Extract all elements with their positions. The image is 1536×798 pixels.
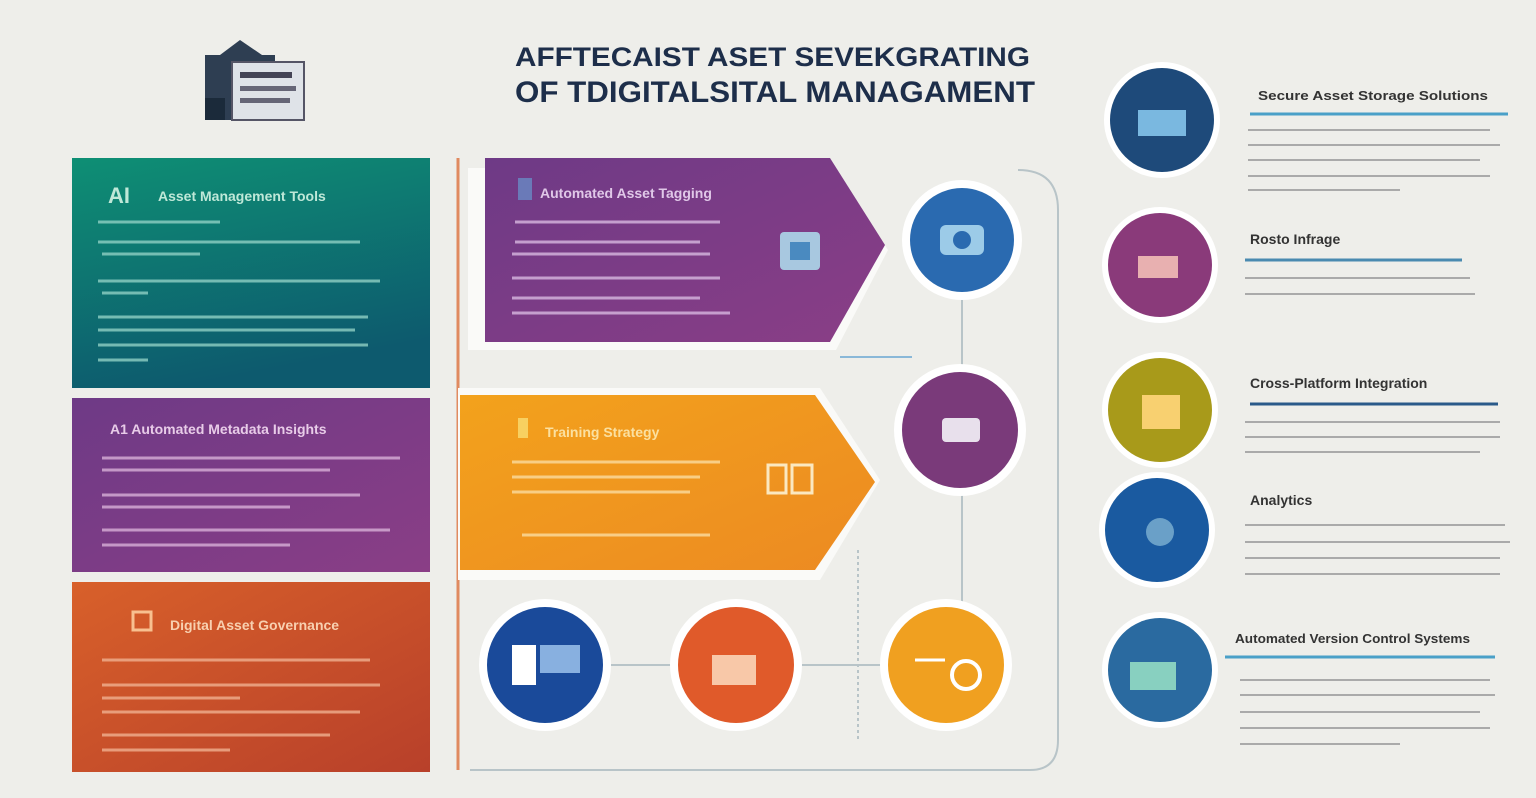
item 1: Secure Asset Storage Solutions [1258, 88, 1488, 103]
item 3: Cross-Platform Integration [1250, 375, 1427, 391]
item 5 [1102, 612, 1495, 744]
panel: red-orange left: Digital Asset Governance [170, 617, 339, 633]
icon: document [780, 232, 820, 270]
icon: circle purple [894, 364, 1026, 496]
panel: orange arrow banner [458, 388, 880, 580]
title [515, 42, 1035, 109]
icon: document header [205, 40, 304, 120]
panel: teal left: Asset Management Tools [158, 188, 326, 204]
icon: grid [768, 465, 812, 493]
item 2: Rosto Infrage [1250, 231, 1340, 247]
item 1 [1104, 62, 1508, 190]
panel: red-orange left [72, 582, 430, 772]
icon: circle navy [479, 599, 611, 731]
item 2 [1102, 207, 1475, 323]
panel: teal left [72, 158, 430, 388]
item 5: Automated Version Control Systems [1235, 631, 1470, 646]
icon: circle red [670, 599, 802, 731]
connectors [470, 170, 1058, 770]
panel: orange arrow banner: Training Strategy [545, 424, 660, 440]
panel: purple left [72, 398, 430, 572]
item 4: Analytics [1250, 492, 1312, 508]
icon: circle orange [880, 599, 1012, 731]
item 4 [1099, 472, 1510, 588]
panel: purple left: A1 Automated Metadata Insights [110, 421, 327, 437]
panel: purple arrow banner: Automated Asset Tagging [540, 185, 712, 201]
title: AFFTECAIST ASET SEVEKGRATING [515, 42, 1030, 72]
panel: teal left: AI [108, 183, 130, 208]
panel: purple arrow banner [468, 158, 888, 350]
title: OF TDIGITALSITAL MANAGAMENT [515, 76, 1035, 109]
right column items [1099, 62, 1510, 744]
item 3 [1102, 352, 1500, 468]
icon: circle blue gear [902, 180, 1022, 300]
